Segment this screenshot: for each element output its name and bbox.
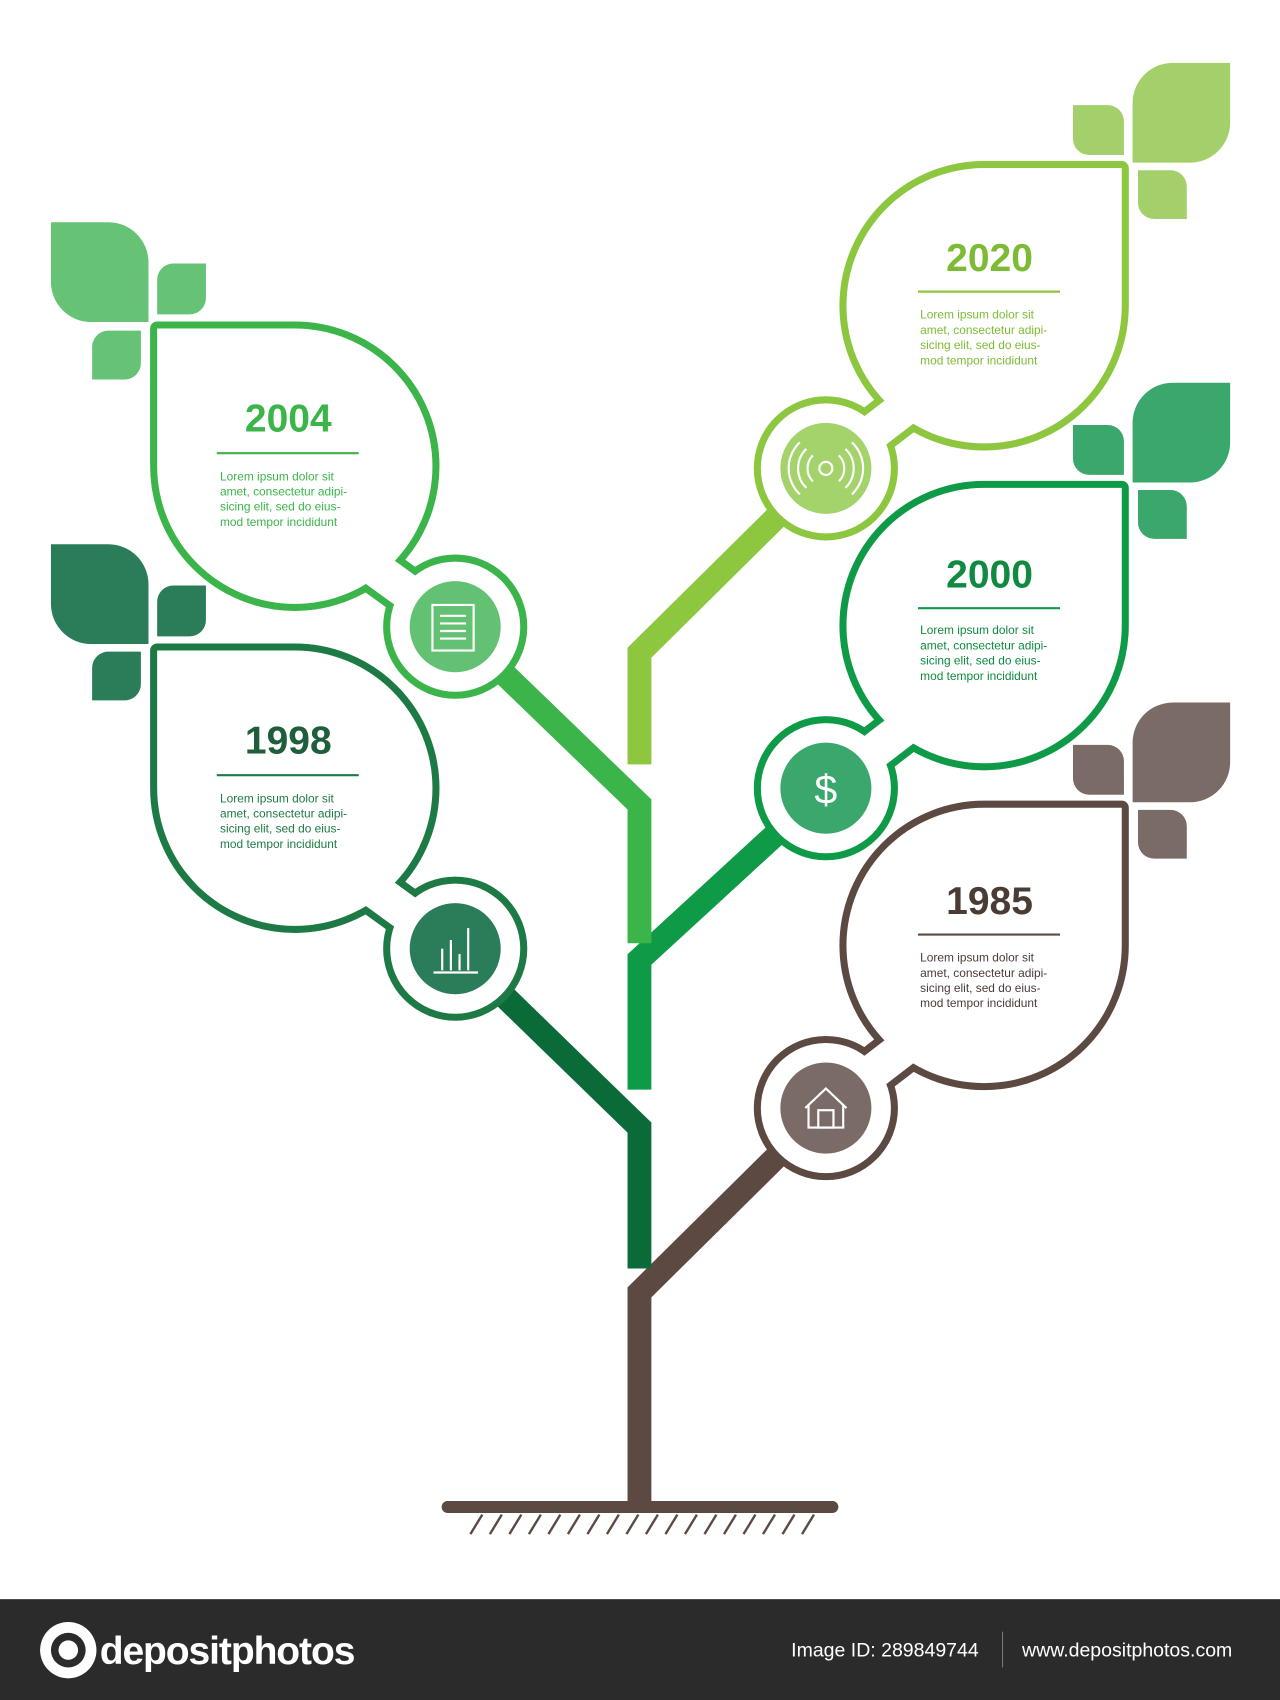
- panel: 2004: mod tempor incididunt: [220, 515, 338, 529]
- tree trunk and branches: [455, 468, 826, 1509]
- footer bar: www.depositphotos.com: [1021, 1640, 1232, 1662]
- leaves: [1073, 703, 1230, 859]
- panel: 2004: sicing elit, sed do eius-: [220, 500, 340, 514]
- leaves: [1073, 383, 1230, 539]
- panel: 1998: Lorem ipsum dolor sit: [220, 791, 335, 805]
- panel: 2000: amet, consectetur adipi-: [920, 638, 1047, 652]
- icon: bar chart: [410, 903, 501, 994]
- leaves: [51, 544, 206, 700]
- panel: 1985: 1985: [946, 880, 1033, 923]
- panel: 2000: sicing elit, sed do eius-: [920, 654, 1041, 668]
- panel: 2020: sicing elit, sed do eius-: [920, 338, 1041, 352]
- panel: 1998: sicing elit, sed do eius-: [220, 822, 340, 836]
- panel: 2000: Lorem ipsum dolor sit: [920, 623, 1035, 637]
- panel: 2000: mod tempor incididunt: [920, 669, 1038, 683]
- panel: 1998: amet, consectetur adipi-: [220, 806, 347, 820]
- panel: 2004: Lorem ipsum dolor sit: [220, 469, 335, 483]
- icon: house: [780, 1062, 871, 1154]
- panel: 2000: 2000: [946, 554, 1033, 597]
- panel: 2004: 2004: [245, 397, 332, 441]
- panel: 2020: mod tempor incididunt: [920, 353, 1038, 367]
- panel: 2020: Lorem ipsum dolor sit: [920, 308, 1035, 322]
- footer bar: depositphotos: [100, 1630, 355, 1673]
- panel: 1998: 1998: [245, 720, 332, 763]
- icon: document: [410, 581, 501, 672]
- footer bar: Image ID: 289849744: [791, 1640, 979, 1662]
- panel: 1985: mod tempor incididunt: [920, 996, 1038, 1010]
- panel: 2000: [761, 383, 1230, 853]
- panel: 2004: amet, consectetur adipi-: [220, 484, 347, 498]
- icon: dollar: $: [814, 766, 837, 812]
- panel: 1985: [761, 703, 1230, 1173]
- panel: 1998: mod tempor incididunt: [220, 837, 338, 851]
- panel: 2020: 2020: [946, 237, 1033, 280]
- panel: 2004: [51, 222, 520, 692]
- panel: 1985: Lorem ipsum dolor sit: [920, 951, 1035, 965]
- icon: signal: [780, 423, 871, 514]
- icon: dollar: [780, 743, 871, 834]
- footer bar: [0, 1599, 1280, 1700]
- leaves: [51, 222, 206, 379]
- panel: 1998: [51, 544, 520, 1014]
- icon: logo camera: [40, 1622, 96, 1678]
- panel: 1985: amet, consectetur adipi-: [920, 966, 1047, 980]
- panel: 2020: amet, consectetur adipi-: [920, 323, 1047, 337]
- leaves: [1073, 63, 1230, 219]
- panel: 2020: [761, 63, 1230, 533]
- ground: [448, 1507, 832, 1534]
- panel: 1985: sicing elit, sed do eius-: [920, 981, 1041, 995]
